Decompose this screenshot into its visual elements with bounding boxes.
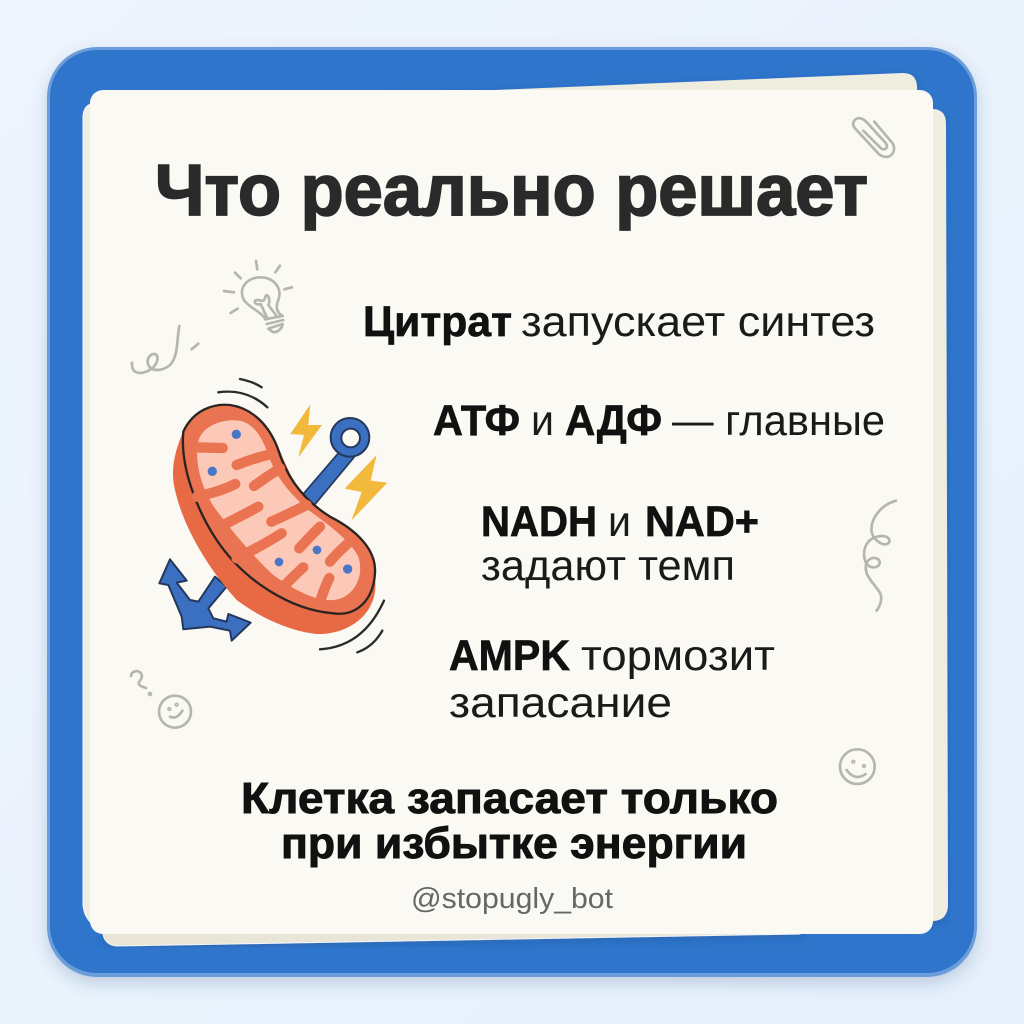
doodle: left squiggle bbox=[132, 326, 198, 373]
conclusion: при избытке энергии bbox=[281, 819, 747, 868]
title: Что реально решает bbox=[155, 151, 868, 231]
text: ATP and ADP: и bbox=[531, 397, 554, 445]
icon: lightning bolts bbox=[290, 404, 387, 521]
top face bbox=[183, 405, 375, 614]
text: AMPK bbox=[449, 632, 775, 727]
text: ATP and ADP bbox=[433, 397, 885, 445]
back sheet: right bbox=[900, 109, 948, 925]
icon: light bulb bbox=[224, 261, 292, 332]
icon: smiley, lower right bbox=[840, 749, 875, 784]
text: citrate: Цитрат bbox=[363, 298, 512, 346]
text: AMPK: запасание bbox=[449, 679, 672, 727]
text: NADH and NAD+: NAD+ bbox=[645, 498, 759, 546]
text: citrate: запускает синтез bbox=[521, 298, 875, 346]
illustration: mitochondrion with anchor bbox=[159, 379, 387, 652]
conclusion: Клетка запасает только bbox=[241, 774, 778, 823]
text: NADH and NAD+: NADH bbox=[481, 498, 597, 546]
mitochondrion outer body bbox=[173, 405, 375, 634]
icon: anchor bbox=[159, 418, 369, 641]
text: AMPK: AMPK bbox=[449, 632, 570, 680]
text: NADH and NAD+ bbox=[481, 498, 759, 590]
text: NADH and NAD+: и bbox=[608, 498, 631, 546]
dots bbox=[208, 430, 352, 574]
text: NADH and NAD+: задают темп bbox=[481, 542, 735, 590]
front sheet bbox=[90, 90, 933, 934]
paper stack bbox=[83, 73, 948, 946]
handle: @stopugly_bot bbox=[411, 883, 613, 915]
doodle: right squiggle bbox=[864, 501, 896, 611]
text: ATP and ADP: АТФ bbox=[433, 397, 520, 445]
motion arcs bbox=[218, 379, 384, 652]
text: AMPK: тормозит bbox=[581, 632, 775, 680]
back sheet: bottom bbox=[103, 920, 800, 946]
back sheet: tilted top bbox=[110, 73, 920, 300]
text: ATP and ADP: АДФ bbox=[565, 397, 662, 445]
icon: paperclip bbox=[853, 118, 894, 157]
text: ATP and ADP: — главные bbox=[672, 397, 885, 445]
text: citrate bbox=[363, 298, 875, 346]
icon: smiley and question mark, lower left bbox=[131, 671, 191, 728]
conclusion bbox=[241, 774, 778, 868]
cristae bbox=[197, 420, 360, 600]
back sheet: left bbox=[83, 103, 130, 925]
